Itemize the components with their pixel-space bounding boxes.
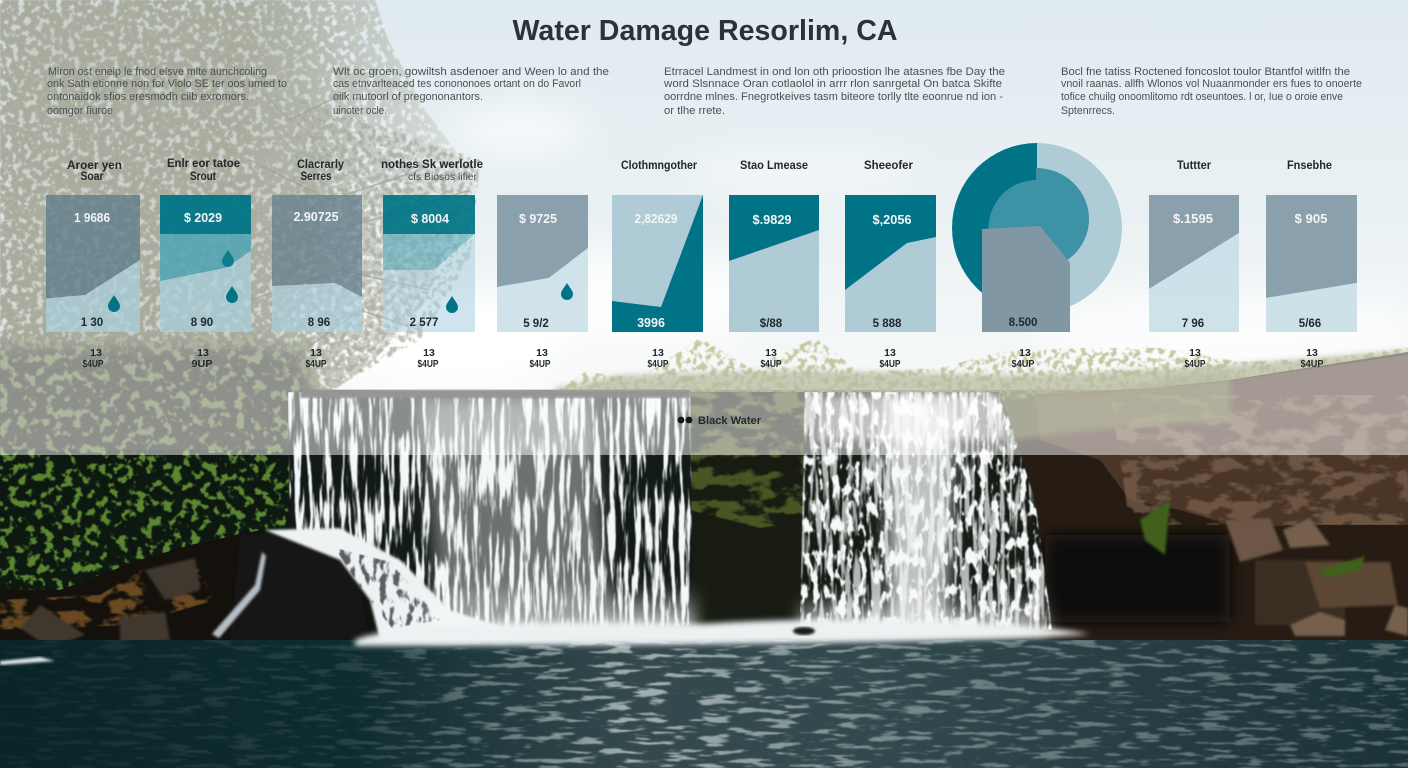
- text block 1: [47, 66, 287, 117]
- text block 2: Wlt oc groen, gowiltsh asdenoer and Ween lo and the: [333, 66, 609, 78]
- donut chart with card: $4UP: [1012, 358, 1034, 370]
- card 3: 8 96: [308, 317, 330, 329]
- card 3: [272, 159, 362, 370]
- card 10: [1149, 160, 1239, 370]
- card 7: [729, 160, 819, 370]
- icon: water drop: [222, 250, 234, 267]
- text block 4: tofice chuilg onoomlitomo rdt oseuntoes. l or, Iue o oroie enve: [1061, 91, 1343, 103]
- text block 1: onk Sath etionne non for Violo SE ter oos umed to: [47, 78, 287, 90]
- card 11: Fnsebhe: [1287, 160, 1332, 172]
- card 10: Tuttter: [1177, 160, 1211, 172]
- text block 1: Miron ost enelp le fnod elsve mlte aunchcoling: [48, 66, 267, 78]
- text block 3: [663, 66, 1005, 117]
- card 5: $4UP: [530, 358, 550, 370]
- card 7: Stao Lmease: [740, 160, 808, 172]
- card 2: Srout: [190, 171, 216, 183]
- card 4: nothes Sk werlotle: [381, 159, 483, 171]
- card 11: 13: [1306, 347, 1318, 359]
- card 3: Serres: [300, 171, 332, 183]
- card 4: cfs Biosos lifier: [408, 172, 478, 183]
- main waterfall: [265, 390, 695, 640]
- card 5: [497, 195, 588, 370]
- card 7: $4UP: [760, 358, 782, 370]
- tree canopy: [0, 0, 480, 480]
- text block 4: Sptenrrecs.: [1061, 105, 1115, 117]
- card 7: 13: [765, 347, 777, 359]
- text block 3: Etrracel Landmest in ond lon oth prioostion lhe atasnes fbe Day the: [664, 66, 1005, 78]
- card 2: 8 90: [191, 317, 213, 329]
- card 4: $4UP: [418, 358, 438, 370]
- card 6: 13: [652, 347, 664, 359]
- card 8: 13: [884, 347, 896, 359]
- icon: water drop: [226, 286, 238, 303]
- pale overlay panel: [0, 0, 1408, 455]
- card 7: $/88: [760, 318, 783, 330]
- clouds: [330, 108, 1408, 390]
- card 3: Clacrarly: [297, 159, 345, 171]
- card 1: [46, 160, 140, 370]
- text block 2: uinoter ocle.: [333, 105, 387, 117]
- card 1: 1 30: [81, 317, 103, 329]
- card 8: [845, 160, 936, 370]
- card 10: 7 96: [1182, 318, 1204, 330]
- card 7: $.9829: [752, 213, 792, 227]
- card 11: 5/66: [1299, 318, 1321, 330]
- text block 2: cas etnvarlteaced tes conononoes ortant on do Favorl: [333, 78, 581, 90]
- second waterfall: [800, 392, 1052, 635]
- card 3: $4UP: [306, 358, 326, 370]
- icon: water drop: [108, 295, 120, 312]
- card 4: 2 577: [410, 317, 438, 329]
- foliage bank above falls: [555, 350, 1408, 396]
- water: [0, 619, 1408, 768]
- text block 3: word Slsnnace Oran cotlaolol in arrr rlon sanrgetal On batca Skifte: [663, 78, 1002, 90]
- text block 4: vnoil raanas. allfh Wlonos vol Nuaanmonder ers fues to onoerte: [1061, 78, 1362, 90]
- card 2: Enlr eor tatoe: [167, 158, 240, 170]
- card 6: 3996: [637, 316, 665, 330]
- card 2: 9UP: [192, 358, 212, 370]
- card 8: $4UP: [880, 358, 900, 370]
- card 1: $4UP: [82, 358, 104, 370]
- card 5: $ 9725: [519, 212, 557, 226]
- donut chart with card: 13: [1019, 347, 1031, 359]
- card 5: 5 9/2: [523, 318, 549, 330]
- card 2: 13: [197, 347, 209, 359]
- card 6: 2,82629: [634, 212, 678, 226]
- title: Water Damage Resorlim, CA: [512, 15, 898, 47]
- left foliage: [0, 450, 300, 600]
- card 4: 13: [423, 347, 435, 359]
- card 11: [1266, 160, 1357, 370]
- lower scene base: [0, 390, 1408, 768]
- card 4: $ 8004: [411, 212, 449, 226]
- card 2: [160, 158, 251, 370]
- card 6: $4UP: [648, 358, 668, 370]
- card 8: Sheeofer: [864, 160, 914, 172]
- donut chart with card: 8.500: [1009, 317, 1037, 329]
- card 3: 2.90725: [294, 210, 339, 224]
- icon: water drop: [446, 296, 458, 313]
- text block 3: oorrdne mlnes. Fnegrotkeives tasm biteore torlly tlte eoonrue nd ion -: [664, 91, 1003, 103]
- card 1: Aroer yen: [67, 160, 122, 172]
- card 1: 13: [90, 347, 102, 359]
- card 6: [612, 160, 703, 370]
- card 10: $4UP: [1184, 358, 1206, 370]
- card 2: $ 2029: [184, 211, 222, 225]
- sky: [0, 0, 1408, 400]
- text block 4: [1061, 66, 1362, 117]
- icon: water drop: [561, 283, 573, 300]
- text block 2: oiik mutoorl of pregononantors.: [333, 91, 483, 103]
- cliff band behind falls: [690, 392, 810, 640]
- legend: Black Water: [698, 415, 762, 427]
- card 11: $4UP: [1300, 358, 1324, 370]
- card 11: $ 905: [1294, 212, 1328, 226]
- text block 3: or tlhe rrete.: [664, 105, 725, 117]
- card 10: 13: [1189, 347, 1201, 359]
- right cliff: [1000, 352, 1408, 640]
- card 1: Soar: [80, 171, 104, 183]
- text block 4: Bocl fne tatiss Roctened foncoslot toulor Btantfol witlfn the: [1061, 66, 1350, 78]
- moss behind falls: [690, 392, 810, 528]
- donut chart with card: [952, 143, 1122, 370]
- card 3: 13: [310, 347, 322, 359]
- text block 2: [333, 66, 609, 117]
- card 10: $.1595: [1173, 212, 1213, 226]
- card 8: $,2056: [872, 213, 912, 227]
- left bank rocks: [0, 530, 370, 655]
- distant shrubs: [555, 338, 1408, 405]
- text block 1: oomgor fiuroe: [47, 105, 113, 117]
- card 8: 5 888: [873, 318, 902, 330]
- text block 1: ontonaidok sfios eresmodh cilb exromors.: [47, 91, 249, 103]
- card 4: [381, 159, 483, 370]
- card 6: Clothmngother: [621, 160, 697, 172]
- card 5: 13: [536, 347, 548, 359]
- card 1: 1 9686: [74, 211, 110, 225]
